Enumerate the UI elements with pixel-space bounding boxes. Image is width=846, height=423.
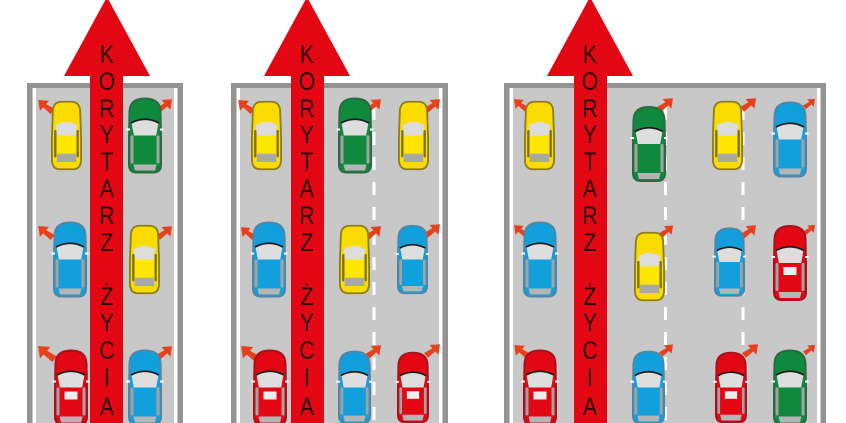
- arrow: corridor of life, road 2: A: [300, 174, 315, 202]
- car: blue, road 2 middle lane: [337, 345, 381, 423]
- arrow: corridor of life, road 3: R: [582, 201, 598, 229]
- arrow: corridor of life, road 2: A: [300, 392, 315, 420]
- arrow: corridor of life, road 2: R: [299, 94, 315, 122]
- arrow: corridor of life, road 3: Y: [583, 308, 597, 336]
- arrow: corridor of life, road 2: I: [304, 363, 310, 391]
- arrow: corridor of life, road 2: T: [301, 147, 313, 175]
- arrow: corridor of life, road 3: O: [582, 67, 598, 95]
- car: yellow, road 2 middle lane: [340, 226, 381, 293]
- arrow: corridor of life, road 3: A: [583, 174, 598, 202]
- car: blue, road 3 lane 2: [631, 345, 673, 423]
- arrow: corridor of life, road 1: A: [100, 174, 115, 202]
- panel: three-lane road: [234, 86, 446, 423]
- arrow: corridor of life, road 1: K: [100, 40, 115, 68]
- arrow: corridor of life, road 3: C: [582, 336, 598, 364]
- car: yellow, road 2 left lane: [238, 100, 281, 169]
- arrow: corridor of life, road 2: Ż: [301, 282, 313, 310]
- arrow: corridor of life, road 1: Ż: [101, 282, 113, 310]
- car: red, road 3 lane 1: [514, 345, 558, 423]
- car: blue, road 3 lane 3: [713, 225, 756, 296]
- arrow: corridor of life, road 2: K: [300, 40, 315, 68]
- arrow: corridor of life, road 2: C: [299, 336, 315, 364]
- arrow: corridor of life, road 3: Y: [583, 120, 597, 148]
- arrow: corridor of life, road 2: Y: [300, 308, 314, 336]
- arrow: corridor of life, road 3: A: [583, 392, 598, 420]
- car: red, road 2 left lane: [241, 346, 288, 423]
- car: blue, road 1 left lane: [38, 222, 88, 296]
- arrow: corridor of life, road 1: T: [101, 147, 113, 175]
- arrow: corridor of life, road 1: Y: [100, 308, 114, 336]
- arrow: corridor of life, road 2: Z: [301, 228, 313, 256]
- arrow: corridor of life, road 3: Ż: [584, 282, 596, 310]
- arrow: corridor of life, road 3: T: [584, 147, 596, 175]
- car: red, road 2 right lane: [396, 344, 440, 422]
- car: yellow, road 2 right lane: [399, 99, 440, 169]
- arrow: corridor of life, road 1: C: [99, 336, 115, 364]
- car: yellow, road 3 lane 3: [713, 98, 756, 169]
- car: green, road 2 middle lane: [336, 98, 381, 172]
- car: yellow, road 1 left lane: [38, 100, 81, 169]
- car: blue, road 3 lane 4: [772, 99, 815, 176]
- arrow: corridor of life, road 3: Z: [584, 228, 596, 256]
- arrow: corridor of life, road 2: [264, 0, 350, 423]
- panel: four-lane road: [506, 86, 824, 423]
- car: blue, road 2 right lane: [396, 224, 440, 293]
- car: red, road 3 lane 3: [714, 344, 758, 422]
- arrow: corridor of life, road 3: K: [583, 40, 598, 68]
- arrow: corridor of life, road 2: R: [299, 201, 315, 229]
- panel: two-lane road: [30, 86, 180, 423]
- car: red, road 3 lane 4: [772, 225, 815, 300]
- arrow: corridor of life, road 1: [64, 0, 150, 423]
- arrow: corridor of life, road 1: O: [99, 67, 115, 95]
- car: blue, road 1 right lane: [126, 346, 172, 423]
- arrow: corridor of life, road 1: R: [99, 94, 115, 122]
- car: blue, road 3 lane 1: [514, 222, 558, 296]
- arrow: corridor of life, road 1: Y: [100, 120, 114, 148]
- car: green, road 3 lane 2: [630, 98, 673, 181]
- car: green, road 3 lane 4: [772, 345, 815, 423]
- car: yellow, road 3 lane 1: [514, 99, 554, 169]
- arrow: corridor of life, road 3: I: [587, 363, 593, 391]
- arrow: corridor of life, road 1: I: [104, 363, 110, 391]
- arrow: corridor of life, road 3: R: [582, 94, 598, 122]
- arrow: corridor of life, road 1: R: [99, 201, 115, 229]
- arrow: corridor of life, road 2: Y: [300, 120, 314, 148]
- car: yellow, road 3 lane 2: [635, 226, 673, 300]
- car: red, road 1 left lane: [38, 346, 90, 423]
- arrow: corridor of life, road 3: [547, 0, 633, 423]
- car: blue, road 2 left lane: [241, 222, 288, 296]
- car: green, road 1 right lane: [126, 98, 172, 172]
- arrow: corridor of life, road 1: Z: [101, 228, 113, 256]
- car: yellow, road 1 right lane: [130, 226, 172, 293]
- arrow: corridor of life, road 2: O: [299, 67, 315, 95]
- arrow: corridor of life, road 1: A: [100, 392, 115, 420]
